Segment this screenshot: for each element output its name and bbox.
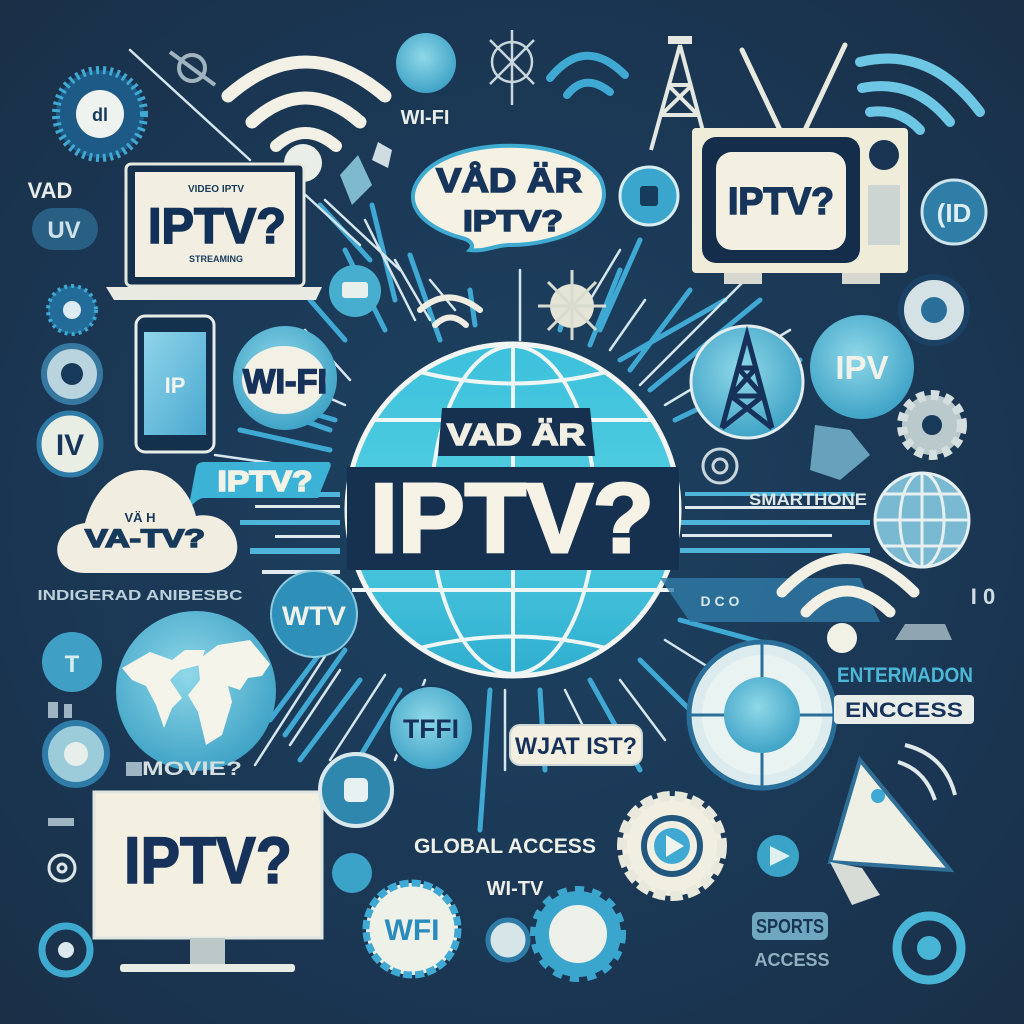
bottom monitor: IPTV? [124, 823, 292, 897]
right round badge: (ID [937, 198, 971, 228]
smartphone [136, 316, 214, 452]
target icon [490, 30, 534, 105]
burst icon top-left: dl [92, 105, 108, 125]
IV badge: IV [56, 429, 84, 462]
top centre speech bubble: VÅD ÄR [436, 162, 582, 200]
gear right [902, 395, 962, 455]
laptop [106, 164, 322, 300]
ribbon under wifi: D C O [701, 593, 740, 609]
globe right [875, 473, 969, 567]
laptop: VIDEO IPTV [188, 184, 244, 195]
GLOBAL ACCESS: GLOBAL ACCESS [414, 835, 596, 858]
bottom-left targets [42, 926, 90, 974]
top-left wifi [228, 62, 385, 146]
retro tv: IPTV? [728, 181, 834, 223]
sports label [752, 912, 828, 940]
large dial [689, 642, 835, 788]
wifi label: WI-FI [401, 107, 449, 129]
blue small ball [757, 835, 799, 877]
left small balls: T [65, 651, 80, 678]
wifi dot lower [827, 623, 857, 653]
top ball [396, 33, 456, 93]
small glyphs left [48, 702, 142, 826]
smart right labels: ENTERMADON [837, 664, 973, 687]
top right wifi [860, 59, 980, 130]
wifi dot [284, 144, 322, 182]
IPTV tag [188, 462, 331, 510]
TFFI badge [389, 686, 473, 770]
UV badge: UV [47, 217, 81, 244]
SMARTPHONE label: SMARTHONE [749, 490, 867, 509]
UV badge [32, 208, 98, 250]
title main: IPTV? [370, 463, 654, 573]
MOVIES label: MOVIE? [142, 759, 242, 780]
WIPTV: WI-TV [487, 878, 544, 900]
access faint: ACCESS [754, 950, 830, 970]
access tag [834, 695, 974, 724]
small top icon [170, 52, 215, 85]
small ball [332, 853, 372, 893]
gear play [622, 796, 722, 896]
IPV ball [810, 315, 914, 419]
small centre ball [488, 920, 528, 960]
WFI badge [366, 883, 458, 975]
WTV rounded: WTV [282, 601, 346, 631]
smartphone: IP [165, 373, 185, 398]
right top note icon [901, 277, 967, 343]
WHAT IS tag: WJAT IST? [515, 733, 637, 760]
top centre speech bubble: IPTV? [463, 205, 563, 238]
top centre speech bubble [413, 146, 604, 250]
horizontal speed lines right [680, 492, 870, 553]
top wifi mid [550, 56, 625, 95]
cloud: VÄ H [124, 510, 156, 525]
bottom monitor [94, 792, 322, 972]
IPV ball: IPV [835, 349, 889, 386]
small leaf icons [340, 142, 392, 205]
WTV rounded [271, 571, 357, 657]
left small balls [42, 632, 102, 692]
small blurred caption left: INDIGERAD ANIBESBC [38, 587, 243, 604]
IV badge [39, 413, 101, 475]
retro tv [692, 45, 908, 284]
tiny circle [703, 449, 737, 483]
sun icon [538, 270, 606, 340]
burst icon top-left [56, 70, 144, 158]
tower ball [691, 326, 803, 438]
left icon globe [44, 346, 100, 402]
cloud [57, 470, 237, 573]
WHAT IS tag [510, 725, 642, 765]
crystal icon [810, 425, 870, 480]
band [347, 467, 679, 570]
spark icon [48, 286, 96, 334]
WI-FI ball: WI-FI [243, 363, 327, 401]
access tag: ENCCESS [845, 699, 963, 722]
right round badge [922, 180, 986, 244]
small grey box [895, 624, 952, 640]
bottom right target [897, 916, 961, 980]
title small: VAD ÄR [447, 417, 585, 452]
sports label: SPORTS [756, 916, 824, 938]
megaphone [830, 745, 955, 905]
WFI badge: WFI [385, 914, 439, 947]
world map globe [116, 611, 276, 771]
laptop: STREAMING [189, 254, 243, 264]
media circle [320, 754, 392, 826]
cloud-like icons centre-top [329, 265, 381, 317]
horizontal speed lines left [235, 492, 340, 574]
gear lower [534, 890, 622, 978]
small wifi center [420, 298, 480, 325]
tower top [651, 40, 708, 150]
laptop: IPTV? [148, 198, 286, 254]
badge top mid [620, 167, 678, 225]
wifi lower right [782, 558, 914, 612]
IPTV tag: IPTV? [218, 466, 312, 498]
central globe [347, 344, 679, 676]
small side text VAD: VAD [28, 178, 72, 203]
radiating lines [130, 50, 800, 830]
TFFI badge: TFFI [403, 714, 459, 744]
small 10 text: I 0 [971, 584, 995, 609]
cloud: VA-TV? [85, 525, 205, 553]
WI-FI ball [233, 326, 337, 430]
ribbon under wifi [660, 578, 880, 622]
